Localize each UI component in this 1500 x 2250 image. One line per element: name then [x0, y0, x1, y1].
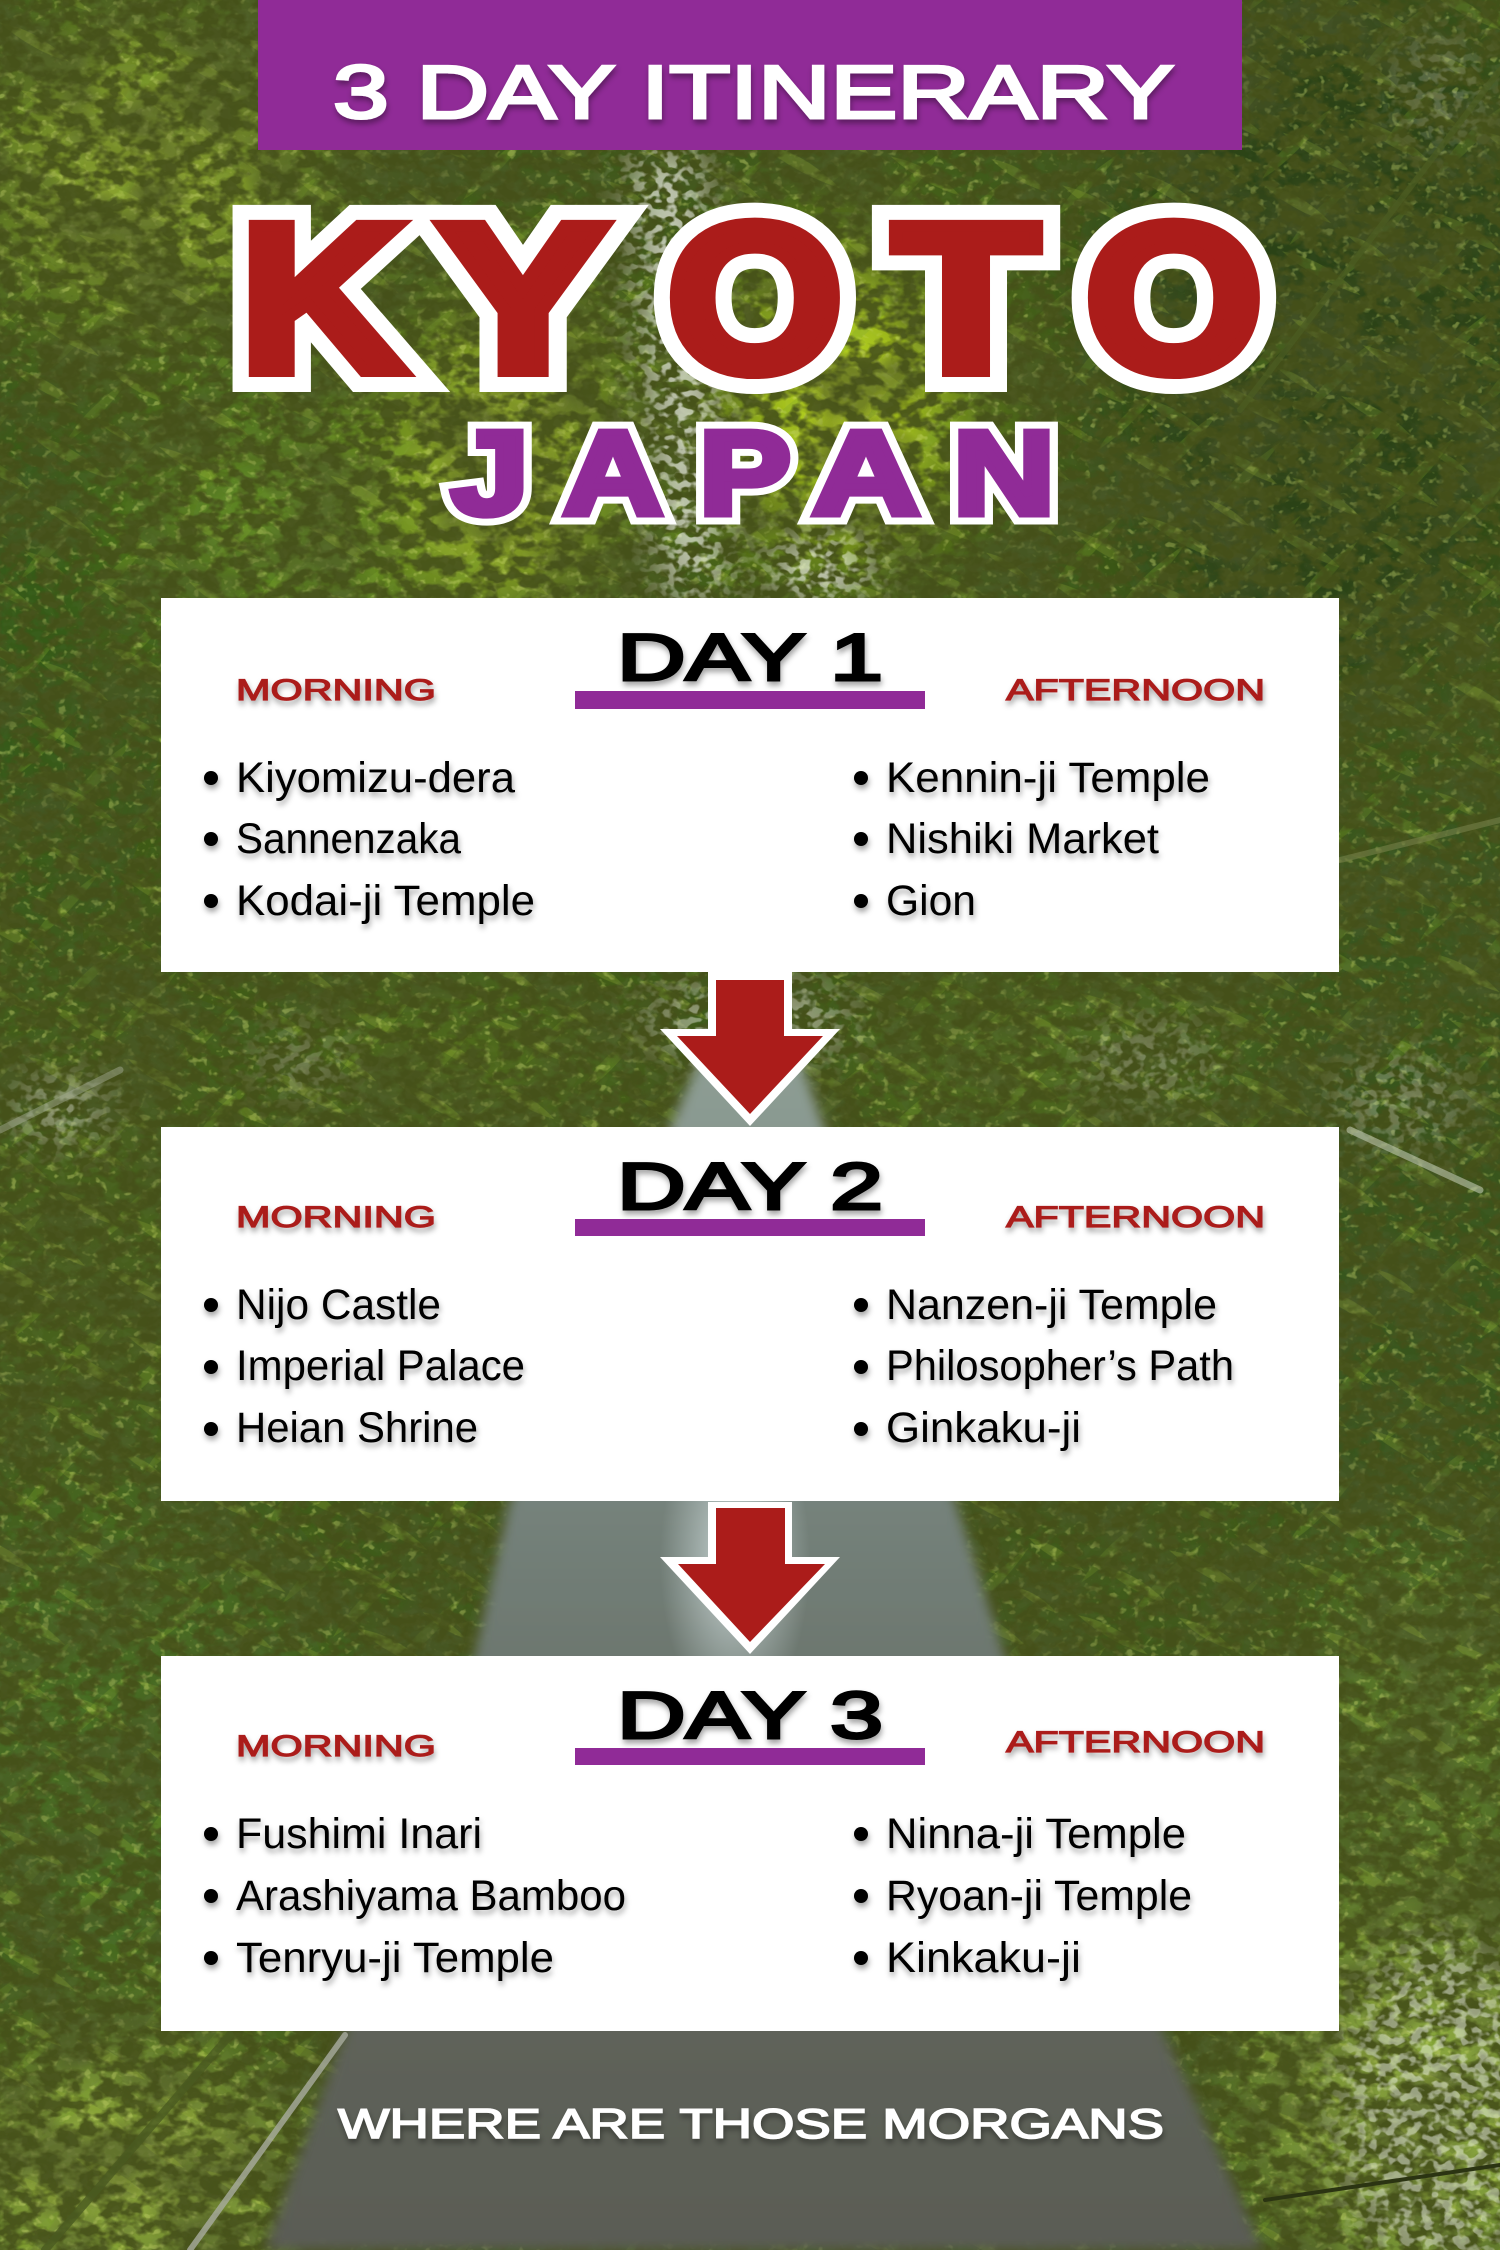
- day 3 morning list: Arashiyama Bamboo: [236, 1872, 626, 1920]
- day 1 heading: DAY 1: [617, 620, 883, 694]
- heading: JAPAN: J: [451, 407, 529, 540]
- day 2 heading: DAY 2: [617, 1149, 883, 1223]
- day 1 morning list: [204, 754, 535, 925]
- title banner: 3 DAY ITINERARY: [333, 50, 1174, 134]
- heading: KYOTO: O: [667, 180, 843, 416]
- heading: JAPAN: N: [953, 407, 1055, 540]
- heading: KYOTO: K: [240, 180, 405, 416]
- day 2 afternoon label: AFTERNOON: [1006, 1201, 1265, 1234]
- arrow: day 1 to day 2: [660, 972, 840, 1126]
- title banner: [258, 0, 1242, 150]
- heading: JAPAN: A: [563, 407, 663, 540]
- day 3 morning list: Fushimi Inari: [236, 1810, 482, 1858]
- day 3 afternoon list: Kinkaku-ji: [886, 1934, 1081, 1982]
- day 2 afternoon list: [854, 1281, 1234, 1452]
- day 2 afternoon list: Nanzen-ji Temple: [886, 1281, 1217, 1329]
- day 2 afternoon list: Philosopher’s Path: [886, 1342, 1234, 1390]
- day 1 afternoon list: Nishiki Market: [886, 815, 1159, 863]
- day 1 afternoon list: [854, 754, 1210, 925]
- day 1 morning list: Kiyomizu-dera: [236, 754, 515, 802]
- day 1 afternoon label: AFTERNOON: [1006, 674, 1265, 707]
- heading: KYOTO: T: [893, 180, 1039, 416]
- day 1 afternoon list: Gion: [886, 877, 976, 925]
- heading: JAPAN: A: [563, 407, 663, 540]
- day 2 morning list: Imperial Palace: [236, 1342, 525, 1390]
- day 1 morning label: MORNING: [236, 674, 436, 707]
- day 2 morning label: MORNING: [236, 1201, 436, 1234]
- day 1 morning list: Kodai-ji Temple: [236, 877, 535, 925]
- day 3 afternoon list: Ninna-ji Temple: [886, 1810, 1186, 1858]
- heading: JAPAN: A: [812, 407, 920, 540]
- arrow: day 2 to day 3: [660, 1502, 840, 1654]
- day 3 morning label: MORNING: [236, 1730, 436, 1763]
- day 2 morning list: Heian Shrine: [236, 1404, 478, 1452]
- day 2 morning list: [204, 1281, 525, 1452]
- heading: JAPAN: P: [699, 407, 791, 540]
- day 2 morning list: Nijo Castle: [236, 1281, 441, 1329]
- panel: day 3: [161, 1656, 1339, 2031]
- day 3 afternoon list: [854, 1810, 1192, 1982]
- heading: KYOTO: Y: [438, 180, 608, 416]
- panel: day 2: [161, 1127, 1339, 1501]
- heading: JAPAN: N: [953, 407, 1055, 540]
- day 1 afternoon list: Kennin-ji Temple: [886, 754, 1210, 802]
- day 3 afternoon list: Ryoan-ji Temple: [886, 1872, 1192, 1920]
- day 1 morning list: Sannenzaka: [236, 815, 461, 863]
- heading: JAPAN: [451, 407, 1055, 540]
- footer credit: WHERE ARE THOSE MORGANS: [338, 2100, 1164, 2147]
- panel: day 1: [161, 598, 1339, 972]
- heading: KYOTO: O: [667, 180, 843, 416]
- heading: KYOTO: [240, 180, 1263, 416]
- heading: JAPAN: A: [812, 407, 920, 540]
- heading: KYOTO: O: [1085, 180, 1263, 416]
- day 3 afternoon label: AFTERNOON: [1006, 1726, 1265, 1759]
- heading: JAPAN: J: [451, 407, 529, 540]
- heading: KYOTO: Y: [438, 180, 608, 416]
- heading: JAPAN: P: [699, 407, 791, 540]
- heading: KYOTO: K: [240, 180, 405, 416]
- day 3 heading: DAY 3: [617, 1678, 883, 1752]
- day 3 morning list: Tenryu-ji Temple: [236, 1934, 554, 1982]
- day 2 afternoon list: Ginkaku-ji: [886, 1404, 1081, 1452]
- heading: KYOTO: O: [1085, 180, 1263, 416]
- day 3 morning list: [204, 1810, 626, 1982]
- heading: KYOTO: T: [893, 180, 1039, 416]
